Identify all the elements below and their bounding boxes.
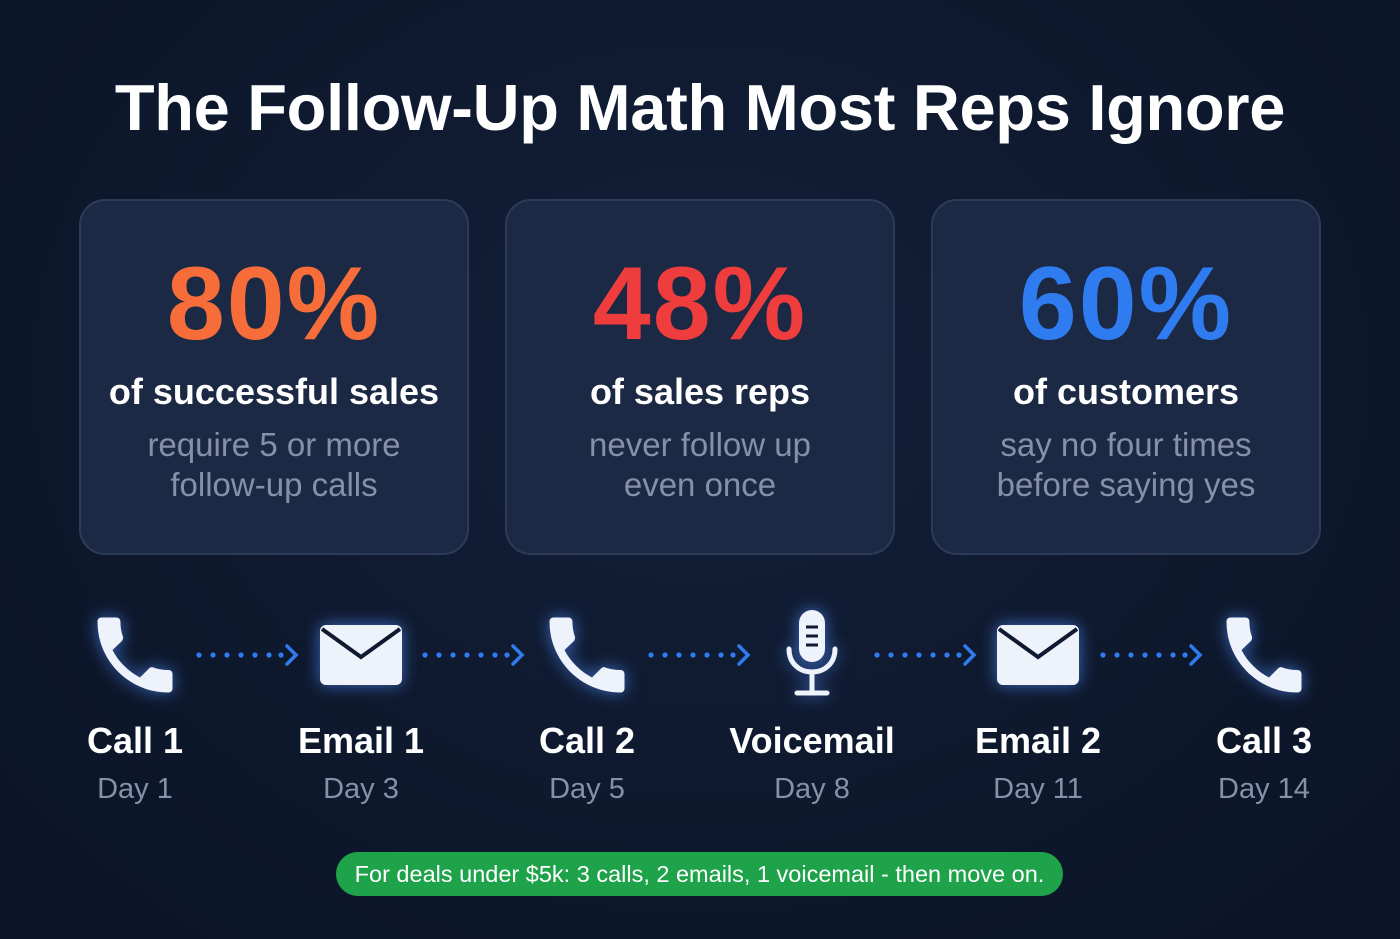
text: Voicemail <box>729 720 895 761</box>
stat label: of successful sales <box>109 371 439 412</box>
arrow <box>422 644 524 666</box>
stat label: of customers <box>1013 371 1239 412</box>
arrow <box>648 644 750 666</box>
text: Call 2 <box>539 720 635 761</box>
icon: envelope <box>308 614 414 697</box>
text: Day 5 <box>549 773 625 805</box>
text: Day 8 <box>774 773 850 805</box>
arrow <box>196 644 298 666</box>
text: Day 1 <box>97 773 173 805</box>
step: Call 2 <box>539 606 636 805</box>
text: Call 3 <box>1216 720 1312 761</box>
stat description <box>589 426 811 503</box>
text: Email 2 <box>975 720 1101 761</box>
callout: recommendation pill <box>336 852 1063 896</box>
text: Day 3 <box>323 773 399 805</box>
stat description <box>147 426 401 503</box>
step: Call 1 <box>86 606 184 805</box>
step: Email 1 <box>298 614 424 805</box>
icon: envelope <box>986 614 1091 697</box>
icon: phone <box>539 606 636 703</box>
stat description: say no four times <box>1000 426 1252 463</box>
stat description <box>997 426 1255 503</box>
icon: microphone <box>778 600 846 706</box>
step: Call 3 <box>1216 606 1313 805</box>
title: The Follow-Up Math Most Reps Ignore <box>115 71 1285 144</box>
text: Day 14 <box>1218 773 1310 805</box>
stat description: require 5 or more <box>147 426 401 463</box>
step: Email 2 <box>975 614 1101 805</box>
arrow <box>1100 644 1202 666</box>
panel: 48% stat <box>505 199 895 555</box>
stat number: 48% <box>593 246 807 362</box>
panel: 80% stat <box>79 199 469 555</box>
icon: phone <box>1216 606 1313 704</box>
callout: recommendation pill: For deals under $5k: 3 calls, 2 emails, 1 voicemail - then move on. <box>355 861 1044 887</box>
step: Voicemail <box>729 600 895 805</box>
stat description: never follow up <box>589 426 811 463</box>
text: Call 1 <box>87 720 183 761</box>
stat label: of sales reps <box>590 371 810 412</box>
text: Email 1 <box>298 720 424 761</box>
stat description: follow-up calls <box>170 466 378 503</box>
panel: 60% stat <box>931 199 1321 555</box>
icon: phone <box>86 606 184 704</box>
stat description: even once <box>624 466 776 503</box>
text: Day 11 <box>993 773 1083 805</box>
arrow <box>874 644 976 666</box>
stat number: 60% <box>1019 246 1233 362</box>
stat description: before saying yes <box>997 466 1255 503</box>
stat number: 80% <box>167 246 381 362</box>
